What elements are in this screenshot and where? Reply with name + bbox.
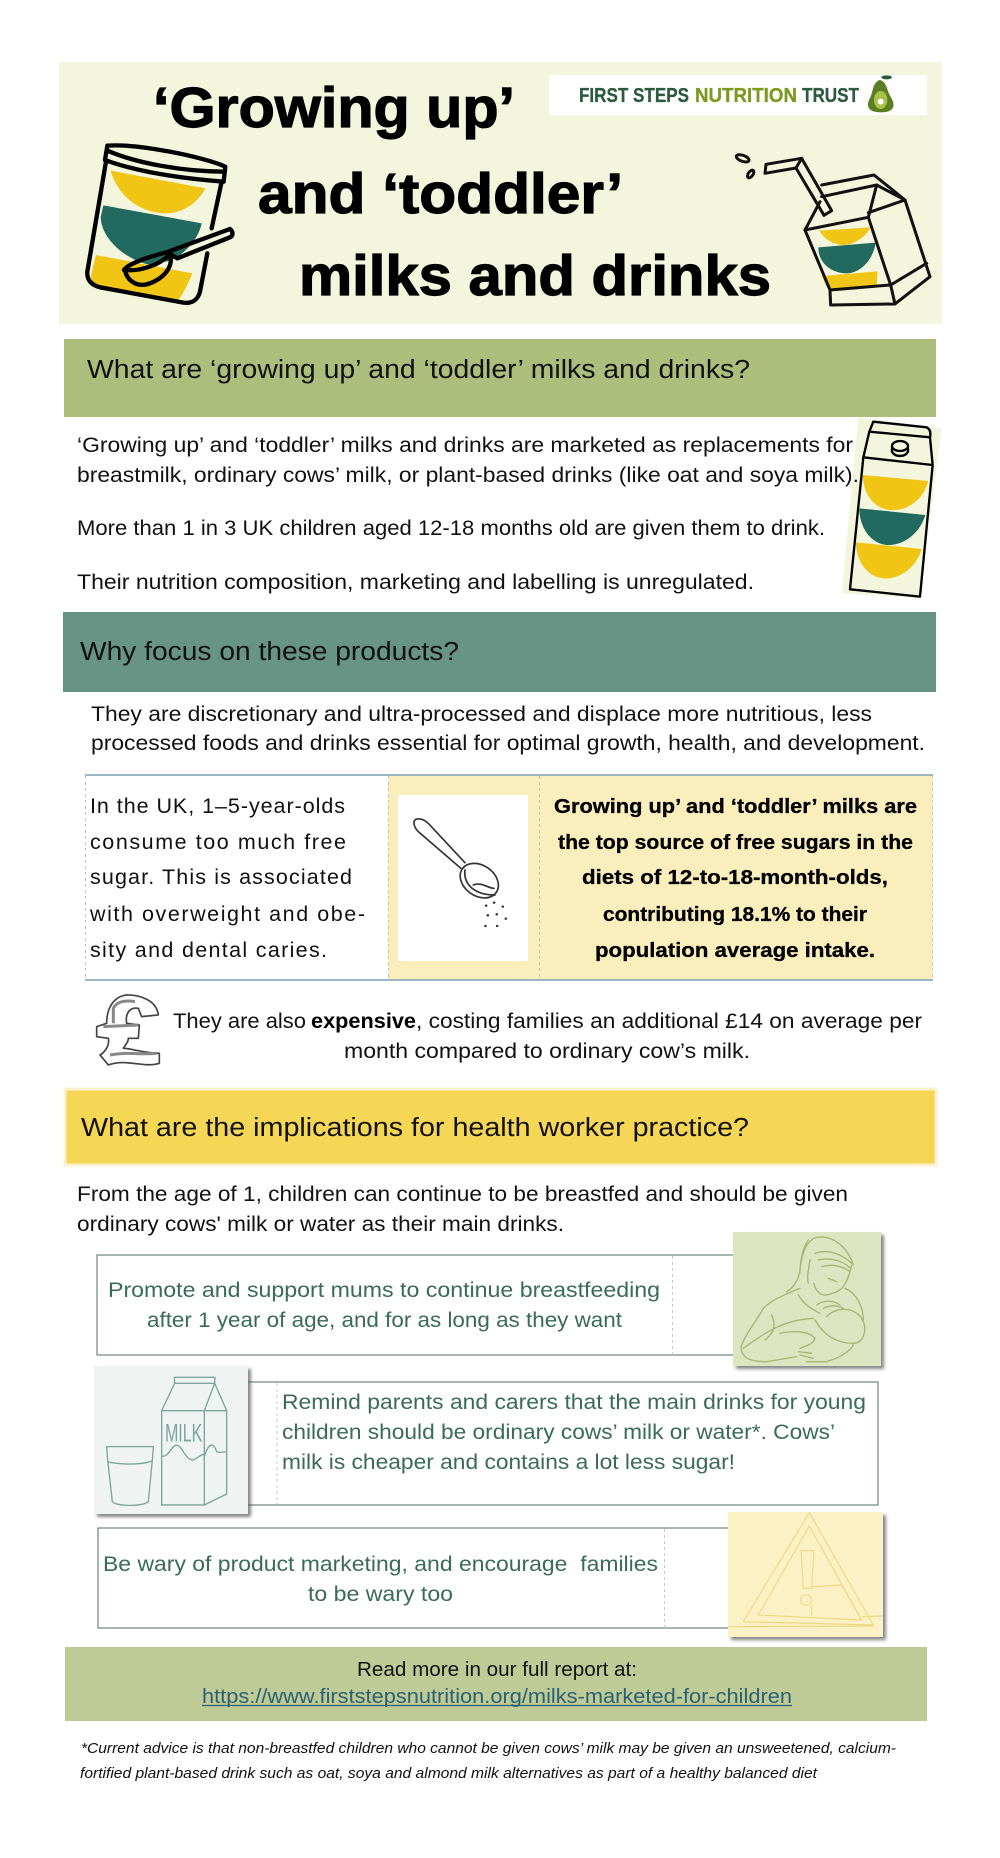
text: product description: breastmilk, ordinary cows’ milk, or plant-based drinks (like oat and soya milk).	[77, 463, 859, 487]
callout: top source of free sugars: contributing 18.1% to their	[603, 903, 867, 926]
text: free sugar consumption: In the UK, 1–5-year-olds	[90, 794, 345, 818]
panel: read more: https://www.firststepsnutrition.org/milks-marketed-for-children	[202, 1685, 792, 1708]
logo	[549, 75, 927, 115]
text: main drinks advice: From the age of 1, children can continue to be breastfed and should be given	[77, 1182, 848, 1206]
text: remind parents	[282, 1390, 866, 1474]
section heading: why focus	[63, 612, 936, 692]
panel: read more: Read more in our full report at:	[357, 1658, 637, 1681]
panel: what are these products	[64, 339, 942, 598]
text: remind parents: milk is cheaper and contains a lot less sugar!	[282, 1450, 735, 1474]
icon: spoon with sugar	[398, 795, 528, 961]
title	[153, 76, 771, 308]
callout: top source of free sugars: the top source of free sugars in the	[558, 831, 913, 854]
panel: implications for health worker practice	[65, 1089, 936, 1637]
panel: free sugars table	[85, 775, 933, 980]
text: be wary: to be wary too	[308, 1582, 453, 1606]
text: main drinks advice	[77, 1182, 848, 1236]
text: promote breastfeeding: Promote and support mums to continue breastfeeding	[108, 1278, 660, 1302]
text: promote breastfeeding	[108, 1278, 660, 1332]
text: be wary: Be wary of product marketing, and encourage families	[103, 1552, 658, 1576]
text: free sugar consumption: sity and dental caries.	[90, 938, 327, 962]
panel: promote breastfeeding	[97, 1232, 881, 1366]
section heading: what are: What are ‘growing up’ and ‘toddler’ milks and drinks?	[87, 356, 750, 384]
logo: NUTRITION	[695, 85, 797, 107]
icon: milk carton	[842, 417, 942, 598]
text: main drinks advice: ordinary cows' milk or water as their main drinks.	[77, 1212, 564, 1236]
text: free sugar consumption: sugar. This is associated	[90, 865, 352, 889]
text: expensive	[173, 1009, 922, 1063]
icon: juice carton with straw	[735, 153, 930, 305]
footnote: fortified plant-based drink such as oat, soya and almond milk alternatives as part of a healthy balanced diet	[80, 1765, 818, 1782]
panel: be wary of marketing	[98, 1512, 883, 1637]
text: be wary	[103, 1552, 658, 1606]
callout: top source of free sugars: population average intake.	[595, 939, 875, 962]
text: product description: ‘Growing up’ and ‘toddler’ milks and drinks are marketed as replacements for	[77, 433, 853, 457]
icon: warning triangle	[728, 1512, 883, 1637]
text: ultra-processed	[91, 702, 925, 755]
text: product description: Their nutrition composition, marketing and labelling is unregulated.	[77, 570, 754, 594]
icon: milk carton and glass: MILK	[165, 1421, 203, 1448]
text: expensive: expensive	[311, 1009, 416, 1033]
title: and ‘toddler’	[258, 162, 623, 226]
text: product description: More than 1 in 3 UK children aged 12-18 months old are given them to drink.	[77, 516, 825, 540]
callout: top source of free sugars	[554, 795, 917, 962]
text: ultra-processed: They are discretionary and ultra-processed and displace more nutritious, less	[91, 702, 872, 726]
icon: formula jar with scoop	[87, 145, 232, 303]
icon: mother breastfeeding	[733, 1232, 881, 1366]
callout: top source of free sugars: Growing up’ and ‘toddler’ milks are	[554, 795, 917, 818]
icon: pound sign	[97, 995, 159, 1065]
callout: top source of free sugars: diets of 12-to-18-month-olds,	[582, 866, 888, 889]
icon: milk carton and glass	[94, 1366, 248, 1514]
text: expensive: month compared to ordinary cow’s milk.	[344, 1039, 750, 1063]
section heading: what are	[64, 339, 936, 417]
logo: TRUST	[802, 85, 859, 107]
panel: read more	[65, 1647, 927, 1721]
logo: FIRST STEPS	[579, 85, 689, 107]
text: promote breastfeeding: after 1 year of age, and for as long as they want	[147, 1308, 622, 1332]
section heading: implications: What are the implications for health worker practice?	[81, 1114, 749, 1142]
header panel	[59, 62, 942, 324]
text: free sugar consumption: with overweight and obe-	[89, 902, 365, 926]
title: ‘Growing up’	[153, 76, 515, 140]
text: ultra-processed: processed foods and drinks essential for optimal growth, health, and development.	[91, 731, 925, 755]
text: remind parents: children should be ordinary cows’ milk or water*. Cows’	[282, 1420, 835, 1444]
title: milks and drinks	[299, 244, 771, 308]
footnote: *Current advice is that non-breastfed children who cannot be given cows’ milk may be given an unsweetened, calcium-	[81, 1740, 896, 1757]
panel: why focus on these products	[63, 612, 936, 1065]
text: product description	[77, 433, 859, 594]
text: free sugar consumption	[89, 794, 365, 962]
text: free sugar consumption: consume too much free	[90, 830, 346, 854]
section heading: implications	[65, 1089, 936, 1165]
section heading: why focus: Why focus on these products?	[80, 638, 459, 666]
panel: remind parents and carers	[94, 1366, 878, 1514]
text: expensive: , costing families an additional £14 on average per	[416, 1009, 922, 1033]
text: expensive: They are also	[173, 1009, 306, 1033]
footnote	[80, 1740, 896, 1782]
text: remind parents: Remind parents and carers that the main drinks for young	[282, 1390, 866, 1414]
